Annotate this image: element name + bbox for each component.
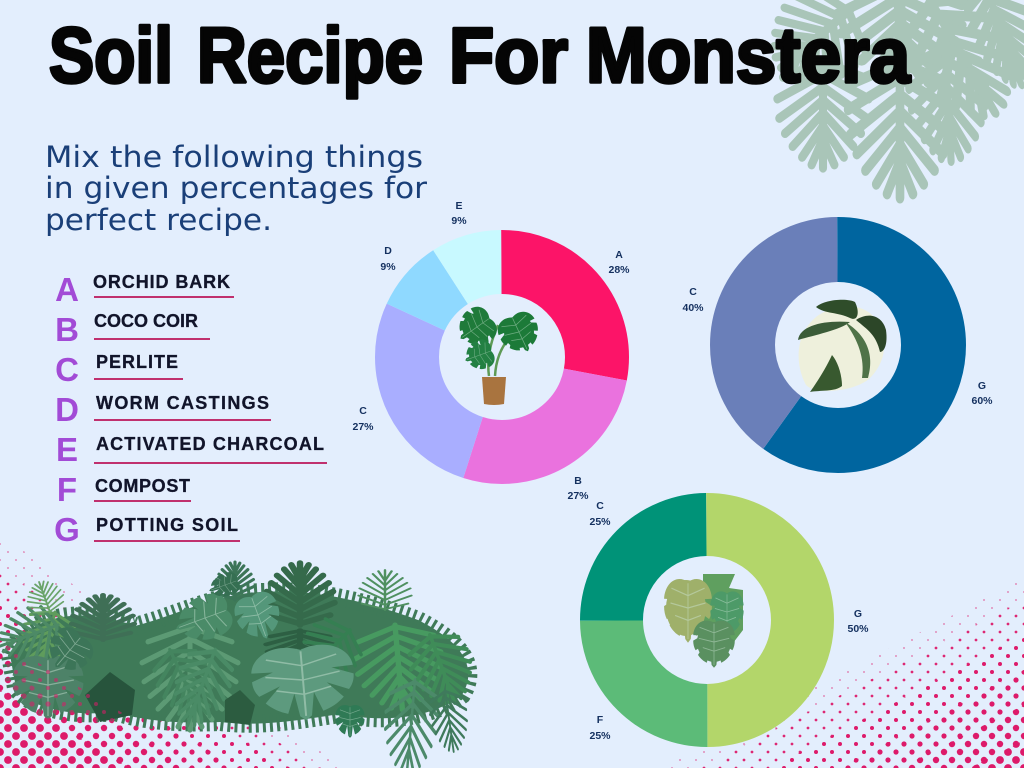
label G 60%: G [978,380,986,392]
label C 27%: C [359,405,367,417]
foliage: top right palm leaves [752,0,1024,198]
label G 60%: 60% [971,395,993,407]
foliage base mass [10,591,468,724]
intro text: perfect recipe. [45,203,272,237]
label D 9%: 9% [380,261,396,273]
legend item D: D [55,391,79,428]
legend item D: WORM CASTINGS [96,393,269,413]
legend item B: B [55,311,79,348]
legend item E: E [56,431,78,468]
foliage: middle palm [142,625,238,730]
legend item F: F [57,471,77,508]
label F 25%: F [597,714,604,726]
legend item F: COMPOST [95,476,190,496]
title: Monstera [586,11,911,99]
ingredient legend [54,271,327,548]
legend item C: C [55,351,79,388]
legend item D [55,391,271,428]
icon: potted monstera [450,302,546,405]
label C 27%: 27% [352,421,374,433]
foliage: left tuft [72,595,134,640]
foliage: left palm [15,605,81,672]
label A 28%: A [615,249,623,261]
intro text: Mix the following things [45,140,423,174]
foliage: top centre tufts [265,563,335,625]
label G 50%: G [854,608,862,620]
legend item A [55,271,234,308]
intro text [45,140,427,237]
title [49,11,911,99]
foliage: monstera leaves [169,589,237,649]
legend item C: PERLITE [96,352,178,372]
icon: variegated monstera leaf [798,300,887,392]
label D 9%: D [384,245,392,257]
label C 25%: C [596,500,604,512]
legend item F [57,471,191,508]
label E 9%: E [455,200,463,212]
legend item A: ORCHID BARK [93,272,230,292]
label C 40%: 40% [682,302,704,314]
legend item G: POTTING SOIL [96,515,238,535]
title: Recipe [197,11,423,99]
legend item B: COCO COIR [94,311,198,331]
legend item G [54,511,240,548]
halftone dots: bottom left [0,535,345,768]
halftone dots: bottom right [660,578,1024,768]
icon: monstera leaf collage [664,574,744,668]
donut chart 3: soil mix C, F and G [612,524,802,716]
label G 50%: 50% [847,623,869,635]
legend item B [55,311,210,348]
legend item E: ACTIVATED CHARCOAL [96,434,324,454]
label C 25%: 25% [589,516,611,528]
chart labels [352,200,993,742]
label A 28%: 28% [608,264,630,276]
label B 27%: 27% [567,490,589,502]
foliage: right palm [359,570,411,610]
donut chart 2: soil mix C and G [742,250,934,440]
donut chart 1: soil mix A to E [407,262,597,452]
title: Soil [49,11,173,99]
label E 9%: 9% [451,215,467,227]
intro text: in given percentages for [45,171,427,205]
label B 27%: B [574,475,582,487]
label C 40%: C [689,286,697,298]
title: For [449,11,568,99]
legend item G: G [54,511,80,548]
label F 25%: 25% [589,730,611,742]
legend item C [55,351,183,388]
legend item E [56,431,327,468]
foliage: bottom left plant cluster [0,562,483,768]
halftone dots over foliage [0,640,215,768]
legend item A: A [55,271,79,308]
